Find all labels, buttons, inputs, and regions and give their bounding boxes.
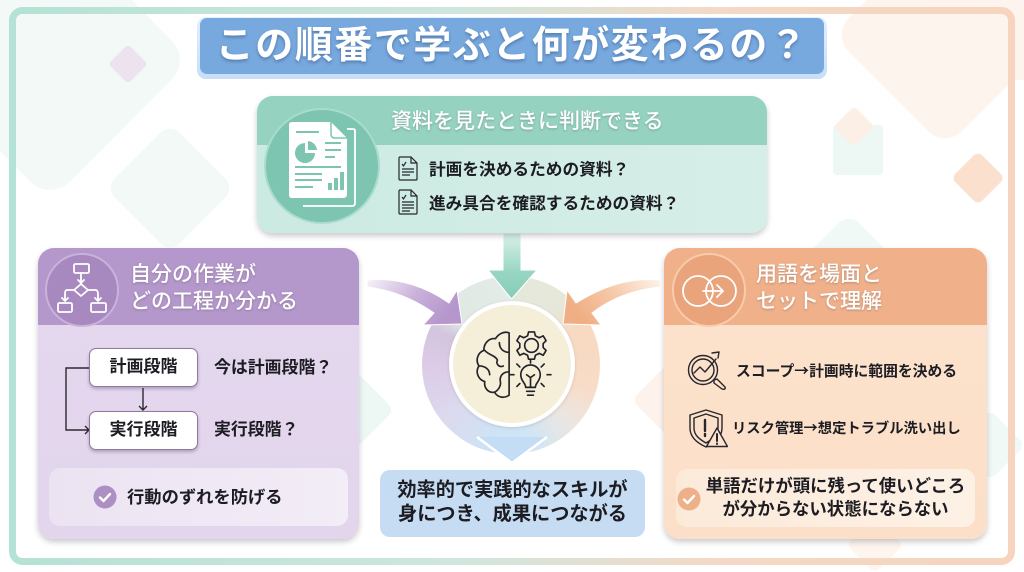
- step: planning: 計画段階: [110, 357, 178, 376]
- panel header band: [257, 96, 767, 145]
- question: planning: 今は計画段階？: [214, 358, 332, 377]
- panel heading: 自分の作業が: [130, 263, 256, 286]
- takeaway text: [706, 476, 965, 519]
- panel heading: セットで理解: [756, 290, 882, 313]
- icon: check: [94, 486, 116, 508]
- result text: [397, 479, 628, 525]
- panel header band: [664, 248, 987, 325]
- list item 1: [398, 156, 629, 181]
- step: planning: [89, 348, 198, 387]
- takeaway box: [676, 469, 975, 527]
- step: execution: [89, 411, 198, 450]
- icon: report documents: [264, 108, 380, 224]
- ring: [422, 276, 600, 454]
- takeaway text: 単語だけが頭に残って使いどころ: [706, 476, 965, 496]
- title background: [200, 18, 824, 74]
- arrows into center: [368, 234, 660, 462]
- title text: この順番で学ぶと何が変わるの？: [216, 25, 808, 67]
- bottom arrow head: [477, 437, 547, 463]
- item text: 進み具合を確認するための資料？: [429, 194, 679, 213]
- panel: left, process: [38, 248, 359, 539]
- icon: checklist document: [398, 189, 418, 215]
- panel heading: 資料を見たときに判断できる: [391, 110, 664, 133]
- term row: scope: [688, 351, 957, 390]
- top arrow: [488, 233, 537, 299]
- result text: 身につき、成果につながる: [398, 504, 627, 525]
- takeaway box: [49, 468, 348, 526]
- list item 2: [398, 189, 679, 215]
- takeaway text: が分からない状態にならない: [722, 499, 949, 519]
- panel heading: [130, 262, 298, 313]
- question: execution: 実行段階？: [214, 420, 298, 439]
- icon: linked circles: [672, 253, 746, 327]
- panel header band: [38, 248, 359, 325]
- term text: リスク管理→想定トラブル洗い出し: [732, 417, 961, 438]
- brain icon circle: [449, 301, 575, 427]
- takeaway text: 行動のずれを防げる: [127, 487, 283, 507]
- icon: check: [678, 488, 700, 510]
- icon: magnifier with chart: [688, 351, 726, 390]
- left arrow: [367, 280, 462, 325]
- item text: 計画を決めるための資料？: [429, 160, 629, 179]
- step: execution: 実行段階: [110, 420, 178, 439]
- panel: top, documents: [257, 96, 767, 233]
- panel heading: どの工程か分かる: [130, 290, 298, 313]
- center convergence diagram: [368, 234, 660, 462]
- right arrow: [563, 280, 660, 325]
- result box: [380, 470, 645, 537]
- flow connectors: [65, 367, 148, 434]
- panel heading: 用語を場面と: [756, 263, 882, 286]
- title banner: [197, 17, 827, 79]
- term text: スコープ→計画時に範囲を決める: [736, 360, 957, 381]
- icon: shield with warning: [689, 409, 728, 448]
- panel: right, terms: [664, 248, 987, 539]
- panel heading: [756, 263, 882, 313]
- icon: flowchart: [45, 253, 119, 327]
- icon: checklist document: [398, 156, 418, 181]
- result text: 効率的で実践的なスキルが: [397, 480, 628, 501]
- term row: risk: [689, 409, 961, 448]
- icon: brain, gear and bulb: [476, 331, 552, 398]
